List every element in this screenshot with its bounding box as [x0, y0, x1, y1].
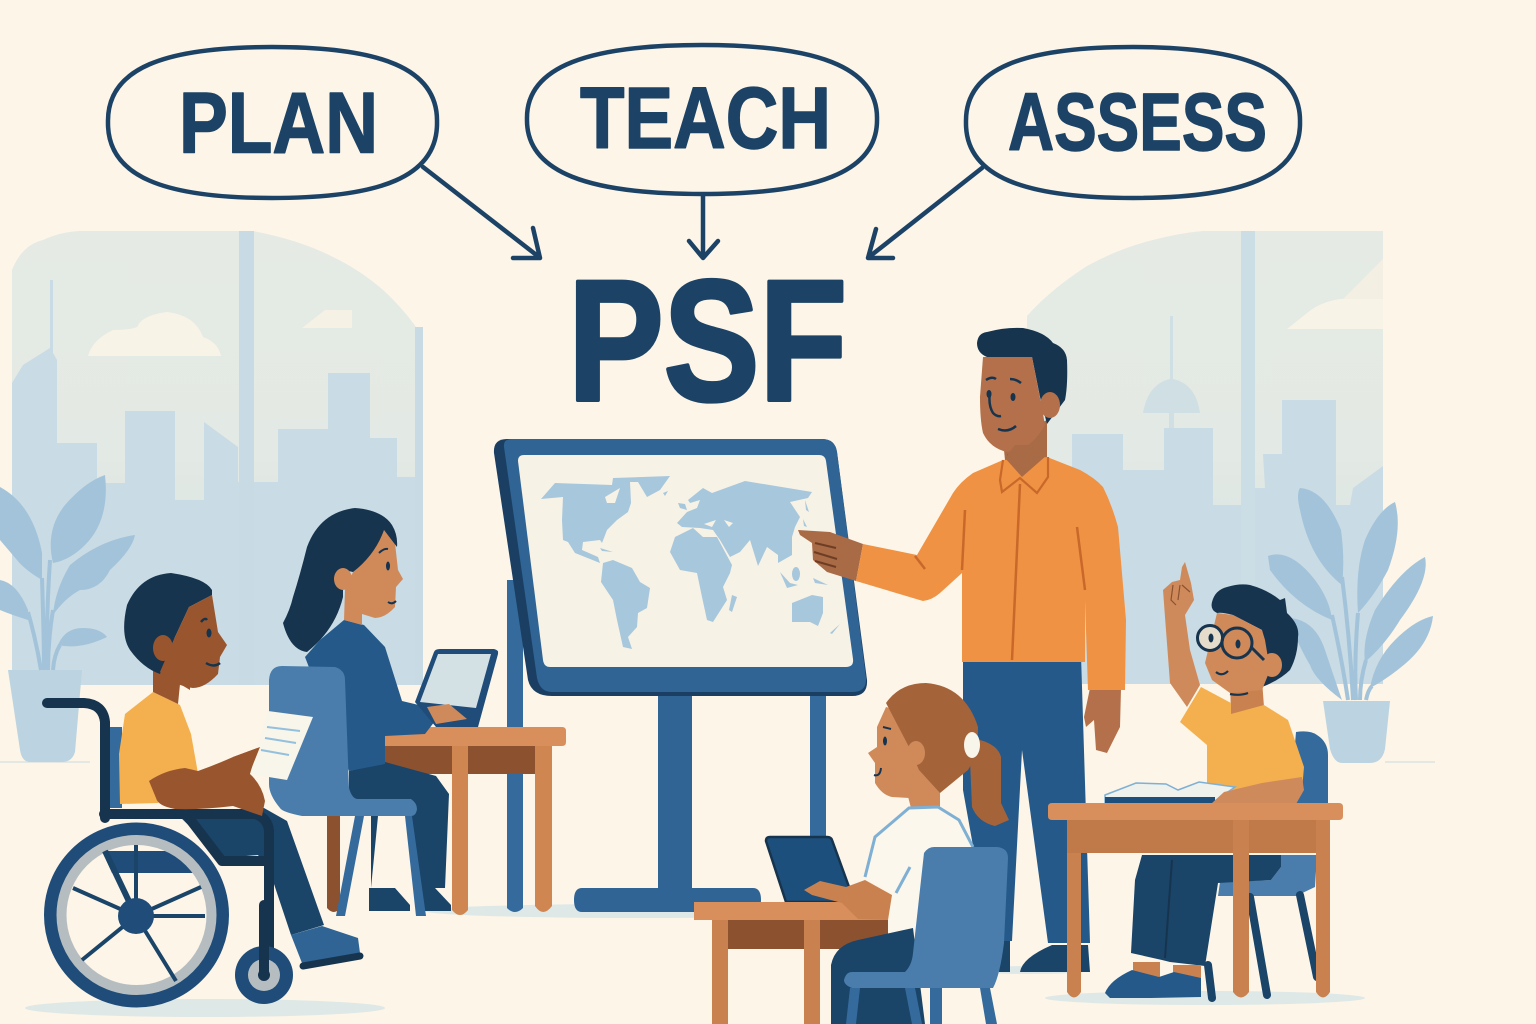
shoes: [999, 941, 1090, 972]
boy raising hand: [1048, 562, 1343, 998]
shoes: [1105, 970, 1201, 998]
desk legs: [1067, 820, 1330, 998]
face details: [201, 619, 220, 666]
board legs: [507, 580, 826, 912]
face details: [874, 727, 891, 775]
left window with skyline: [12, 231, 423, 685]
chair: [269, 666, 417, 816]
small wheel: [235, 905, 293, 1004]
teach bubble: TEACH: [580, 70, 831, 167]
torso: [1180, 687, 1304, 790]
wheelchair back: [107, 727, 122, 808]
hair: [283, 508, 397, 652]
hair: [124, 573, 212, 674]
desk: [384, 727, 566, 746]
pointing hand: [798, 530, 863, 581]
ear: [907, 741, 925, 765]
shirt: [856, 457, 1126, 690]
shoe: [291, 926, 360, 963]
right window with skyline: [1027, 231, 1383, 684]
world map: [541, 476, 840, 649]
trousers: [963, 655, 1090, 943]
plan bubble: PLAN: [179, 76, 378, 172]
arrow: assess to PSF: [868, 168, 982, 258]
neck: [1003, 420, 1047, 477]
plan bubble: [108, 47, 437, 198]
floor line: [0, 761, 1435, 763]
face: [344, 530, 403, 625]
sweater: [305, 620, 435, 771]
legs: [349, 762, 449, 888]
legs: [175, 808, 324, 935]
ponytail: [970, 740, 1009, 826]
right hand: [1084, 688, 1121, 753]
ear: [153, 635, 173, 661]
desk apron: [728, 920, 888, 949]
face details: [986, 378, 1028, 456]
shirt: [865, 807, 973, 930]
desk top: [1048, 803, 1343, 820]
paper hand: [233, 747, 260, 782]
face: [1205, 613, 1270, 693]
chair back: [1290, 731, 1328, 803]
face details: [379, 549, 396, 603]
face details: [1208, 634, 1214, 642]
assess bubble: [966, 47, 1300, 198]
ankles: [1133, 962, 1201, 978]
neck: [153, 667, 190, 704]
arrow: teach to PSF: [689, 195, 718, 258]
neck: [1230, 680, 1264, 715]
neck: [905, 785, 940, 808]
resting arm: [1212, 777, 1304, 804]
arm: [149, 747, 265, 816]
laptop: [415, 649, 498, 727]
raised arm: [1163, 562, 1200, 707]
scrunchie: [964, 732, 980, 758]
board frame: [494, 439, 867, 696]
big wheel: [50, 829, 222, 1001]
chair legs: [1208, 895, 1317, 998]
desk: [694, 902, 888, 920]
legs: [831, 928, 925, 1024]
tablet: [766, 837, 849, 902]
plant: left: [0, 475, 135, 762]
ear: [1040, 392, 1060, 418]
desk apron: [1067, 820, 1330, 853]
face: [160, 595, 227, 688]
hair: [1212, 584, 1298, 687]
book: [1105, 782, 1235, 803]
assess bubble: ASSESS: [1008, 77, 1267, 168]
ear: [1262, 653, 1282, 677]
teacher: [798, 328, 1126, 972]
PSF title: PSF: [568, 245, 847, 437]
glasses: [1198, 626, 1264, 660]
back desk leg: [327, 816, 340, 912]
paper: [250, 711, 313, 780]
teach bubble: [527, 45, 877, 194]
arm: [804, 880, 892, 920]
shoes: [369, 888, 451, 911]
head: [980, 357, 1045, 452]
wheelchair frame: [47, 703, 269, 978]
ear: [334, 568, 352, 590]
hand: [427, 704, 467, 724]
boy in wheelchair: [47, 573, 360, 1004]
board stand: [574, 690, 761, 912]
legs: [1131, 855, 1281, 966]
collar: [1000, 457, 1048, 493]
plant: right: [1268, 488, 1433, 763]
arrow: plan to PSF: [423, 167, 540, 258]
torso: [119, 692, 199, 804]
screen: [518, 455, 853, 667]
face: [868, 707, 935, 798]
girl with ponytail: [694, 683, 1009, 1024]
hair: [886, 683, 978, 793]
chair: [844, 847, 1008, 988]
hair: [977, 328, 1067, 424]
display board: [494, 439, 867, 912]
seat: [102, 851, 193, 873]
desk legs: [712, 920, 820, 1024]
girl at laptop: [269, 508, 566, 916]
floor shadows: [25, 904, 1365, 1017]
